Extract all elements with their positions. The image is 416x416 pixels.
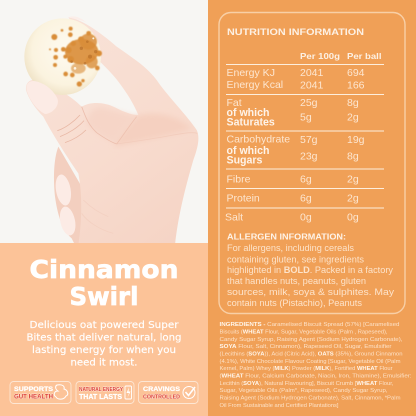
row: protein: Protein: [226, 192, 260, 204]
row: energy: 166: [347, 80, 365, 92]
row: carbohydrate: 8g: [347, 150, 359, 162]
row: energy: 2041: [300, 67, 324, 79]
allergen information: that handles nuts, peanuts, gluten: [227, 276, 366, 287]
allergen information: highlighted in BOLD. Packed in a factory: [227, 265, 393, 276]
panel: product description: [0, 243, 208, 416]
badge: cravings controlled: CONTROLLED: [143, 394, 180, 400]
ingredients text: Lecithin ( SOYA ), Natural Flavouring], Biscuit Crumb [ WHEAT Flour,: [220, 381, 394, 387]
badge: natural energy that lasts: [76, 382, 134, 404]
row: protein: 6g: [300, 192, 312, 204]
row: fat: 8g: [347, 97, 359, 109]
row: fat: of which: [226, 107, 269, 119]
ingredients text: SOYA Flour, Salt, Cinnamon), Rapeseed Oil, Sugar, Emulsifier: [220, 344, 392, 350]
badge: natural energy that lasts: THAT LASTS: [79, 392, 122, 401]
allergen information: ALLERGEN INFORMATION:: [227, 232, 346, 242]
ingredients text: (4.1%), White Chocolate Flavour Coating [Sugar, Vegetable Oil (Palm: [220, 359, 400, 365]
description text: Delicious oat powered Super: [30, 320, 179, 331]
description text: need it most.: [70, 358, 138, 368]
thumb nail: [26, 81, 58, 114]
row: carbohydrate: 57g: [300, 134, 318, 146]
upper finger nail: [53, 173, 73, 207]
allergen information: [227, 232, 394, 309]
row: carbohydrate: of which: [226, 145, 269, 157]
back fingers: [54, 147, 85, 245]
panel: nutrition side background: [208, 0, 416, 416]
allergen information: For allergens, including cereals: [227, 243, 354, 254]
row: fat: 2g: [347, 112, 359, 124]
row: fat: Saturates: [226, 116, 275, 128]
badge: supports gut health: [10, 382, 71, 404]
title: [30, 255, 178, 311]
ingredients text: Oil From Sustainable and Certified Plantations]: [220, 403, 339, 409]
row: salt: [225, 212, 359, 224]
row: carbohydrate: Carbohydrate: [226, 134, 290, 146]
table header: [300, 51, 382, 61]
row: carbohydrate: 19g: [347, 134, 365, 146]
row: carbohydrate: Sugars: [226, 154, 263, 166]
row: salt: Salt: [225, 212, 243, 224]
row: energy: [226, 67, 365, 92]
panel: photo background: [0, 0, 208, 243]
row: fibre: 6g: [300, 174, 312, 186]
index fingertip nail edge: [68, 16, 86, 22]
title: Cinnamon: [30, 255, 178, 284]
row: energy: 694: [347, 67, 365, 79]
ingredients text: (WHEAT Flour, Calcium Carbonate, Niacin, Iron, Thiamine), Emulsifier:: [220, 374, 412, 380]
ingredients text: Candy Sugar Syrup, Raising Agent (Sodium Hydrogen Carbonate),: [220, 337, 402, 343]
ingredients text: Kernel, Palm) Whey ( MILK ) Powder ( MILK ), Fortified WHEAT Flour: [220, 366, 393, 372]
row: energy: Energy Kcal: [226, 79, 283, 91]
row: protein: 2g: [347, 192, 359, 204]
allergen information: contain nuts (Pistachio), Peanuts: [227, 298, 362, 309]
description text: Bites that deliver natural, long: [26, 332, 182, 344]
row: protein: [226, 192, 359, 204]
ingredients text: INGREDIENTS - Caramelised Biscuit Spread (57%) [Caramelised: [220, 322, 400, 328]
row: carbohydrate: [226, 134, 365, 166]
description text: [26, 320, 182, 368]
table header: Per ball: [347, 51, 382, 61]
heading: NUTRITION INFORMATION: [227, 27, 364, 38]
badge: natural energy that lasts: NATURAL ENERGY: [79, 387, 124, 393]
row: salt: 0g: [347, 212, 359, 224]
row: fat: 25g: [300, 97, 318, 109]
description text: lasting energy for when you: [32, 345, 176, 356]
row: energy: Energy KJ: [226, 67, 275, 79]
row: fibre: 2g: [347, 174, 359, 186]
allergen information: containing gluten, see ingredients: [227, 254, 364, 266]
row: fibre: [226, 174, 359, 186]
allergen information: sources, milk, soya & sulphites. May: [227, 287, 394, 298]
ball: [24, 18, 101, 95]
panel: nutrition information: [219, 12, 405, 314]
lower finger nail: [57, 205, 78, 237]
icon: hand holding ball: [24, 16, 198, 245]
row: carbohydrate: 23g: [300, 150, 318, 162]
row: fat: Fat: [226, 97, 242, 109]
row: fat: [226, 97, 359, 128]
ingredients text: Biscuits ( WHEAT Flour, Sugar, Vegetable Oils (Palm , Rapeseed),: [220, 330, 388, 336]
hand shading: [57, 107, 197, 233]
ingredients text: [220, 322, 412, 409]
index finger, middle finger, palm and thumb: [26, 17, 198, 245]
table header: Per 100g: [300, 51, 340, 61]
row: salt: 0g: [300, 212, 312, 224]
badge: supports gut health: GUT HEALTH: [14, 394, 53, 400]
row: fat: 5g: [300, 112, 312, 124]
ingredients text: Sugar, Vegetable Oils (Palm*, Rapeseed), Candy Sugar Syrup,: [220, 388, 388, 394]
title: Swirl: [70, 282, 138, 311]
ingredients text: Raising Agent (Sodium Hydrogen Carbonate), Salt, Cinnamon, *Palm: [220, 396, 400, 402]
crumbs: [49, 27, 102, 87]
ingredients text: (Lecithins ( SOYA )), Acid (Citric Acid), OATS (35%), Ground Cinnamon: [220, 352, 403, 358]
row: energy: 2041: [300, 80, 324, 92]
badge: cravings controlled: [138, 382, 198, 404]
badge: supports gut health: SUPPORTS: [14, 386, 53, 393]
row: fibre: Fibre: [226, 174, 251, 186]
badge: cravings controlled: CRAVINGS: [143, 386, 180, 393]
